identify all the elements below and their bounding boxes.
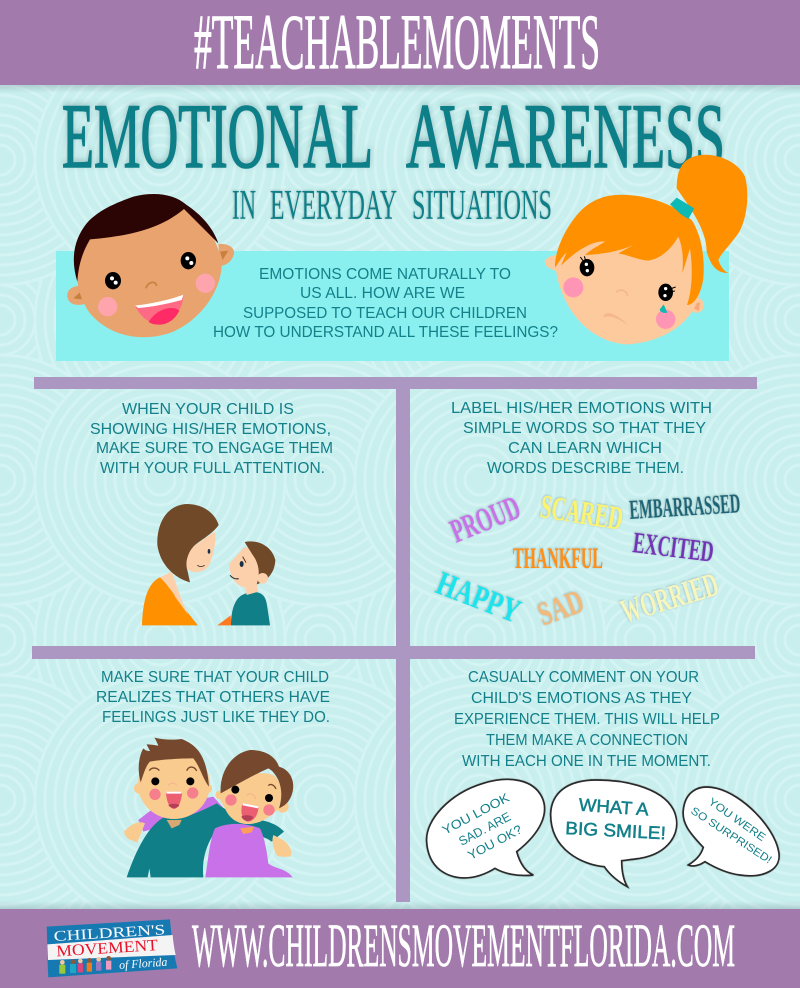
speech bubble: what a big smile: WHAT A <box>578 795 649 820</box>
header band <box>0 0 800 85</box>
divider lines <box>32 377 757 902</box>
panel text: attention <box>90 401 333 477</box>
panel text: attention: MAKE SURE TO ENGAGE THEM <box>96 440 333 457</box>
word: happy: HAPPY <box>431 565 526 631</box>
speech bubble: you were so surprised <box>683 787 779 876</box>
panel text: others have feelings: REALIZES THAT OTHERS HAVE <box>96 689 330 706</box>
panel text: label emotions: SIMPLE WORDS SO THAT THEY <box>463 420 706 437</box>
panel text: others have feelings <box>96 669 330 726</box>
speech bubble: you look sad: YOU LOOK <box>440 790 512 838</box>
subtitle: SITUATIONS <box>412 183 552 229</box>
icon: mother and child <box>142 504 275 625</box>
logo: children's movement of florida: CHILDREN'S <box>53 922 166 945</box>
intro text: HOW TO UNDERSTAND ALL THESE FEELINGS? <box>213 324 558 341</box>
word: proud: PROUD <box>445 489 526 550</box>
speech bubble: you look sad: SAD. ARE <box>457 810 513 849</box>
panel text: comment on emotions: CASUALLY COMMENT ON YOUR <box>468 669 699 686</box>
intro text <box>213 266 558 341</box>
speech bubbles <box>427 779 779 887</box>
speech bubble: you look sad: YOU OK? <box>466 822 524 863</box>
word: sad: SAD <box>533 583 589 634</box>
icon: two friends <box>124 738 293 877</box>
word: worried: WORRIED <box>617 566 723 631</box>
intro text: US ALL. HOW ARE WE <box>300 285 465 302</box>
emotion words <box>431 488 741 634</box>
panel text: label emotions: LABEL HIS/HER EMOTIONS WITH <box>451 400 712 417</box>
panel text: label emotions <box>451 400 712 477</box>
logo: children's movement of florida <box>47 919 177 977</box>
panel text: comment on emotions: EXPERIENCE THEM. THIS WILL HELP <box>454 711 720 728</box>
panel text: comment on emotions: THEM MAKE A CONNECTION <box>486 732 688 749</box>
panel text: comment on emotions: WITH EACH ONE IN THE MOMENT. <box>462 753 711 770</box>
speech bubble: what a big smile <box>551 780 677 887</box>
main title: EMOTIONAL <box>62 85 373 187</box>
logo: children's movement of florida: of Florida <box>119 955 168 972</box>
intro panel <box>56 251 729 361</box>
subtitle: EVERYDAY <box>270 183 397 229</box>
panel text: others have feelings: MAKE SURE THAT YOUR CHILD <box>101 669 329 686</box>
logo: children's movement of florida: MOVEMENT <box>56 937 159 960</box>
panel text: label emotions: WORDS DESCRIBE THEM. <box>487 460 684 477</box>
panel text: attention: WHEN YOUR CHILD IS <box>122 401 294 418</box>
footer band <box>0 909 800 988</box>
icon: happy boy face <box>67 194 234 337</box>
intro text: SUPPOSED TO TEACH OUR CHILDREN <box>243 305 527 322</box>
intro text: EMOTIONS COME NATURALLY TO <box>259 266 511 283</box>
subtitle: IN <box>232 183 256 229</box>
panel text: comment on emotions <box>454 669 720 770</box>
panel text: comment on emotions: CHILD'S EMOTIONS AS THEY <box>471 690 692 707</box>
word: excited: EXCITED <box>631 526 716 569</box>
speech bubble: you were so surprised: SO SURPRISED! <box>688 805 774 866</box>
speech bubble: you were so surprised: YOU WERE <box>706 796 767 844</box>
icon: ponytail girl face <box>545 155 747 344</box>
speech bubble: you look sad <box>427 779 545 878</box>
panel text: attention: WITH YOUR FULL ATTENTION. <box>100 460 325 477</box>
panel text: attention: SHOWING HIS/HER EMOTIONS, <box>90 421 331 438</box>
word: scared: SCARED <box>538 488 626 538</box>
speech bubble: what a big smile: BIG SMILE! <box>565 818 666 843</box>
panel text: others have feelings: FEELINGS JUST LIKE THEY DO. <box>102 709 330 726</box>
word: thankful: THANKFUL <box>513 542 603 575</box>
panel text: label emotions: CAN LEARN WHICH <box>508 440 662 457</box>
